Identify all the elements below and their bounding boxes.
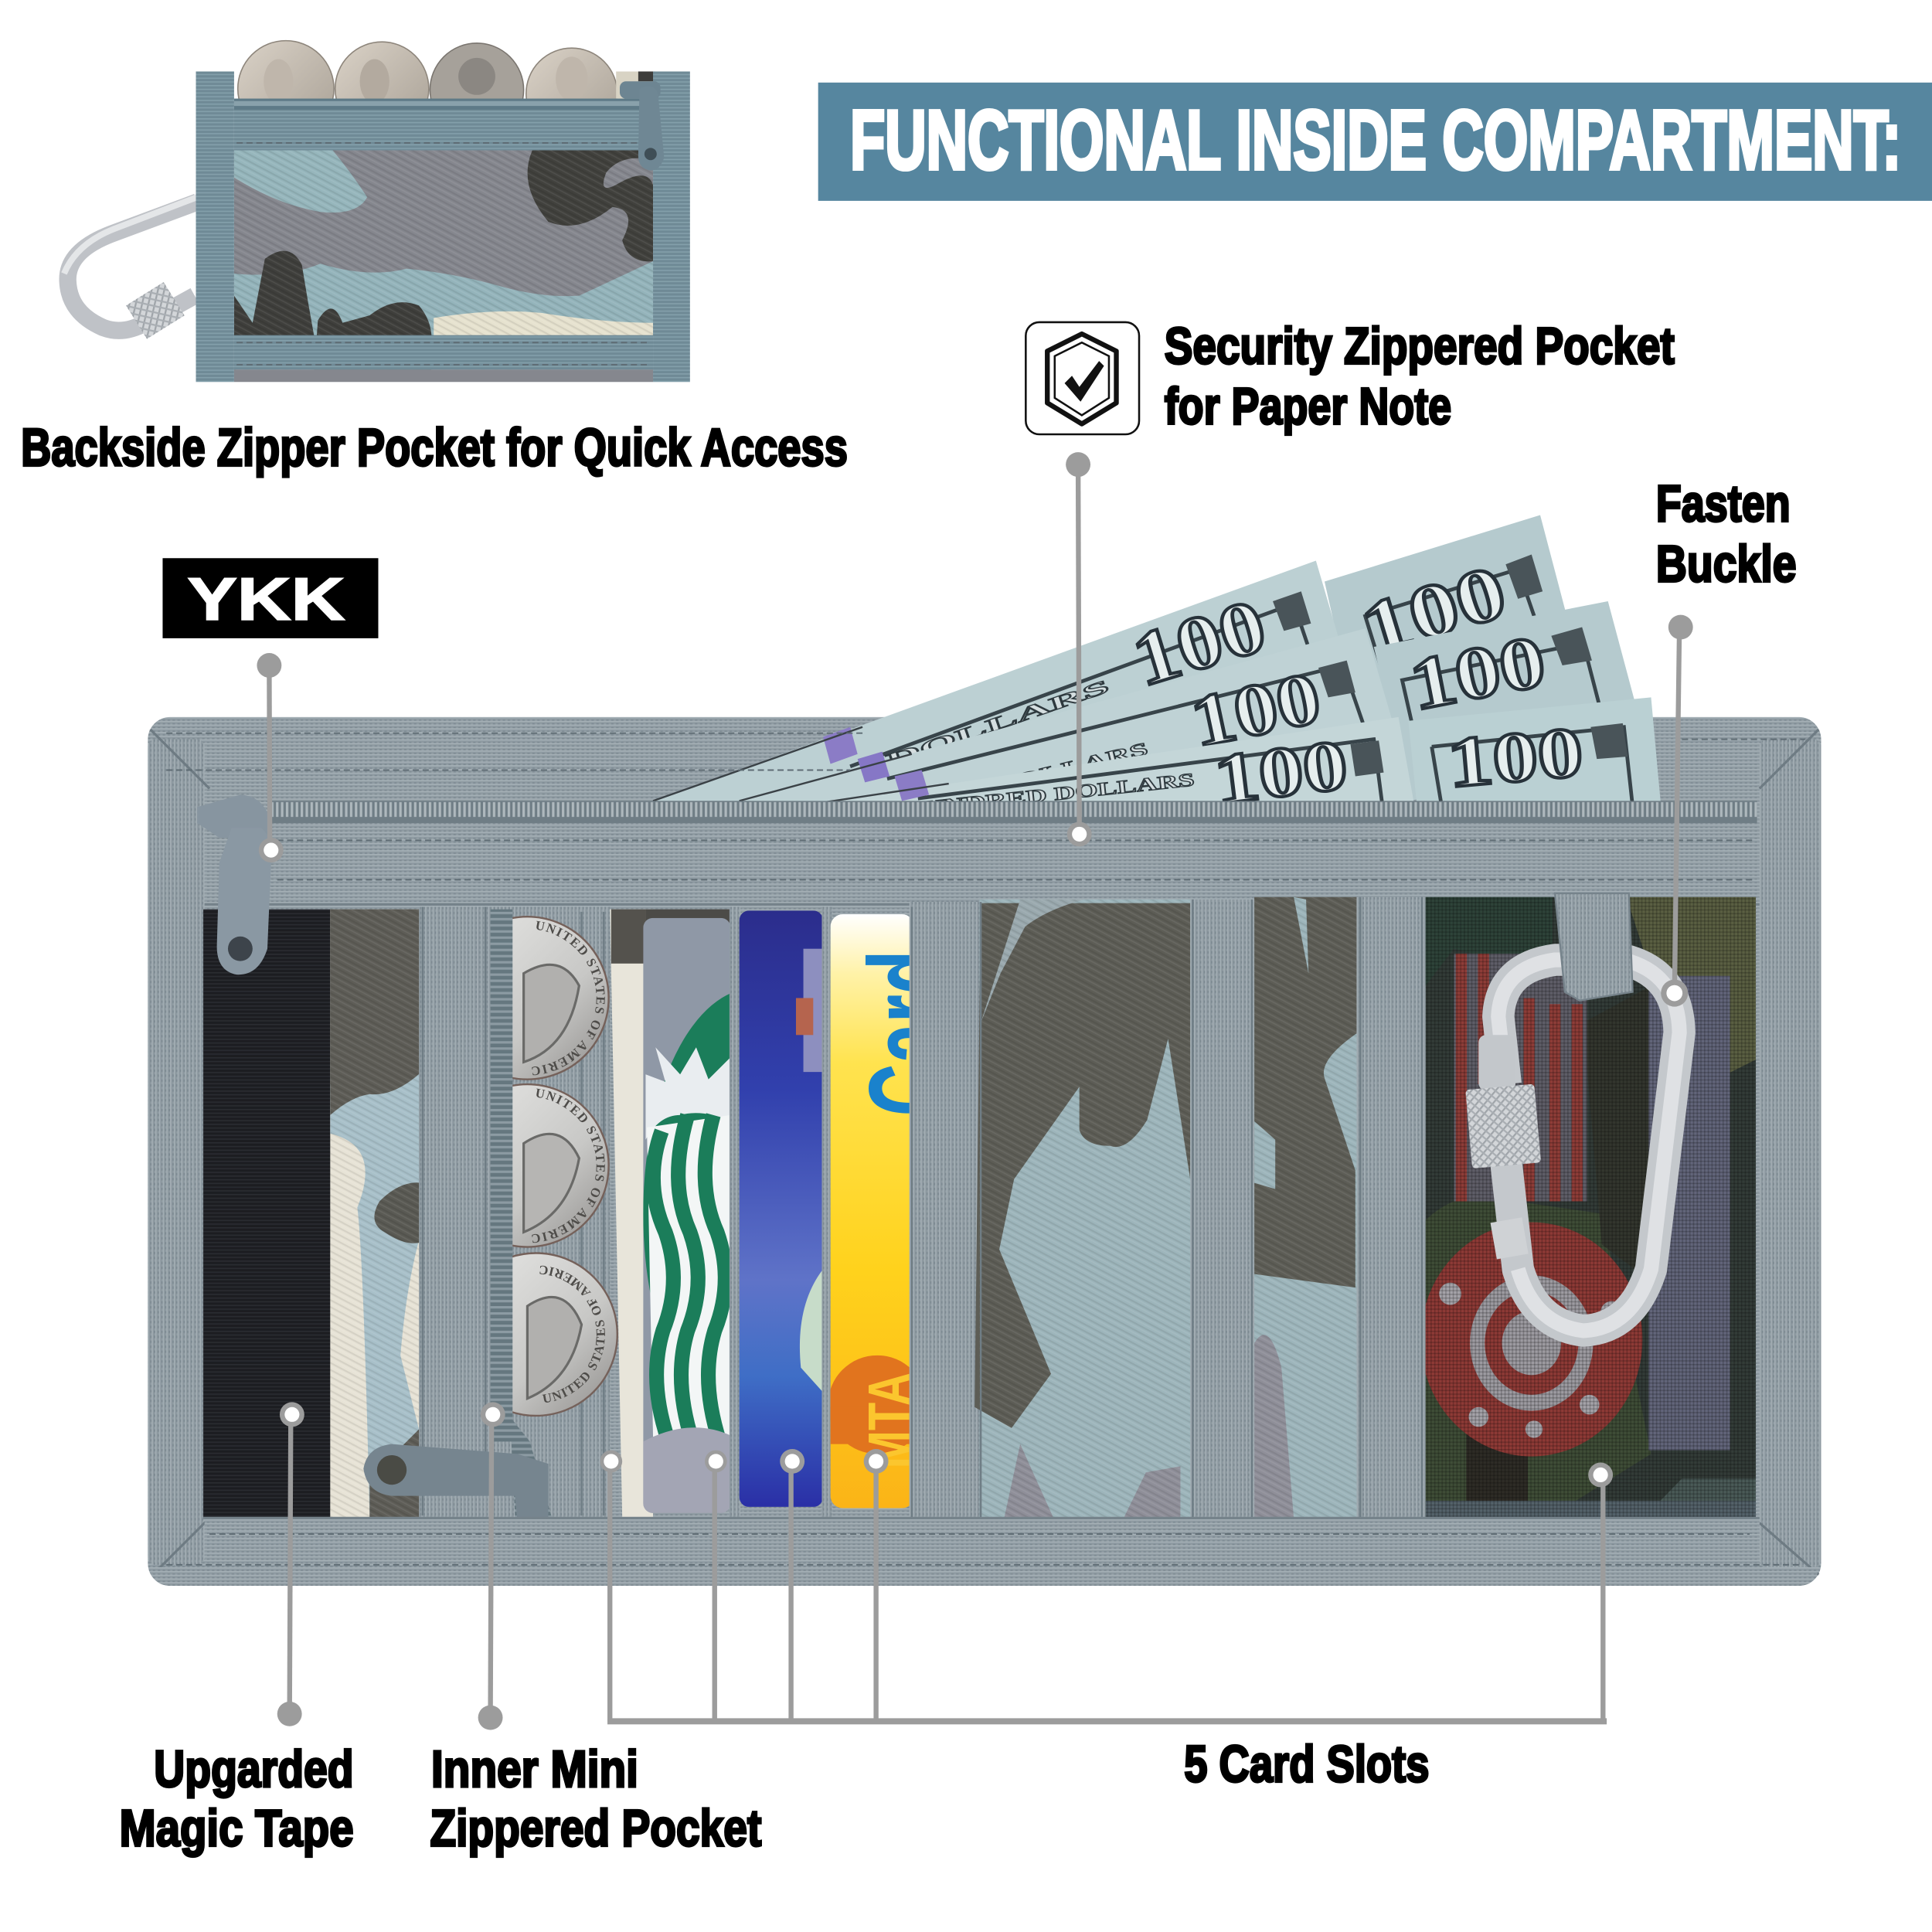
banknotes fan: 100 — [1184, 656, 1328, 764]
coin pocket strap — [419, 906, 610, 1518]
card divider strap — [821, 906, 832, 1518]
bracket: 5 card slots — [600, 1449, 1613, 1724]
card: yellow transit card — [830, 914, 910, 1509]
label: inner mini zippered pocket: Inner Mini — [431, 1740, 638, 1798]
banknotes fan: 100 — [1352, 549, 1515, 672]
camo slot centre — [975, 900, 1192, 1518]
icon: shield check — [1026, 322, 1139, 434]
banknotes fan: 100 — [1444, 713, 1587, 803]
wallet bottom band — [151, 1518, 1818, 1586]
label: magic tape: Upgarded — [154, 1740, 354, 1798]
coins in pocket: UNITED STATES OF AMERICA — [539, 1266, 605, 1403]
banknotes fan — [653, 515, 1661, 821]
caption: backside zipper pocket: Backside Zipper Pocket for Quick Access — [21, 418, 848, 478]
inner mini zipper — [491, 910, 552, 1518]
label: security zippered pocket — [1165, 317, 1675, 435]
camo panel left — [330, 910, 434, 1518]
slot strap — [1356, 897, 1427, 1518]
small zipper pull — [620, 81, 664, 170]
badge: YKK — [162, 558, 378, 638]
top-left zipper pull — [197, 794, 271, 975]
banknotes fan: HUNDRED DOLLARS — [900, 770, 1196, 821]
small wallet: backside view with coins and carabiner — [64, 41, 690, 382]
label: inner mini zippered pocket: Zippered Pocket — [430, 1799, 761, 1857]
card: yellow transit card: Card — [845, 950, 977, 1117]
label: fasten buckle — [1656, 474, 1797, 594]
small carabiner — [64, 197, 197, 339]
label: security zippered pocket: Security Zippered Pocket — [1165, 317, 1675, 375]
flag through mesh — [1454, 954, 1587, 1202]
left binding — [148, 740, 205, 1565]
coins in pocket: UNITED STATES OF AMERICA — [532, 1088, 605, 1243]
wallet outer webbing — [148, 717, 1821, 1586]
label: magic tape: Magic Tape — [120, 1799, 354, 1857]
main zipper tape — [269, 801, 1757, 823]
carabiner with loop — [1465, 893, 1679, 1331]
label: magic tape — [120, 1740, 354, 1857]
banknotes fan: DOLLARS — [884, 676, 1112, 772]
slot strap — [910, 902, 981, 1518]
small wallet camo fabric — [234, 151, 653, 369]
label: security zippered pocket: for Paper Note — [1165, 377, 1451, 435]
mesh pocket — [1420, 897, 1756, 1523]
badge: YKK: YKK — [187, 565, 345, 633]
callout: fasten buckle — [1661, 615, 1693, 1007]
red badge through mesh — [1420, 1223, 1642, 1457]
banknotes fan: DOLLARS — [990, 740, 1150, 798]
card: green logo card — [643, 918, 730, 1513]
main open wallet — [148, 452, 1821, 1586]
callout: YKK zipper — [257, 653, 284, 862]
callout: magic tape — [277, 1402, 304, 1726]
label: fasten buckle: Buckle — [1656, 536, 1797, 594]
callout: security pocket — [1066, 452, 1092, 846]
banknotes fan: 100 — [1403, 620, 1552, 726]
banknotes fan: 100 — [1210, 726, 1352, 820]
card: yellow transit card: MTA — [857, 1372, 923, 1469]
bottom zipper pull — [363, 1444, 549, 1523]
band under zipper — [205, 823, 1760, 904]
camo slot right — [1254, 897, 1358, 1518]
banknotes fan: 100 — [1124, 583, 1275, 702]
label: inner mini zippered pocket — [430, 1740, 761, 1857]
carabiner webbing loop — [1555, 893, 1633, 1001]
slot strap — [1190, 900, 1256, 1518]
cream fabric behind cards — [610, 910, 653, 1518]
coins in pocket — [512, 916, 618, 1417]
small wallet coins — [236, 40, 617, 99]
label: fasten buckle: Fasten — [1656, 474, 1791, 532]
right binding — [1760, 740, 1821, 1567]
card: blue card — [740, 910, 823, 1507]
card divider strap — [730, 906, 740, 1518]
callout: inner mini zipper — [478, 1402, 505, 1730]
velcro strip — [203, 910, 334, 1518]
label: 5 card slots: 5 Card Slots — [1184, 1735, 1429, 1793]
coins in pocket: UNITED STATES OF AMERICA — [532, 921, 605, 1076]
